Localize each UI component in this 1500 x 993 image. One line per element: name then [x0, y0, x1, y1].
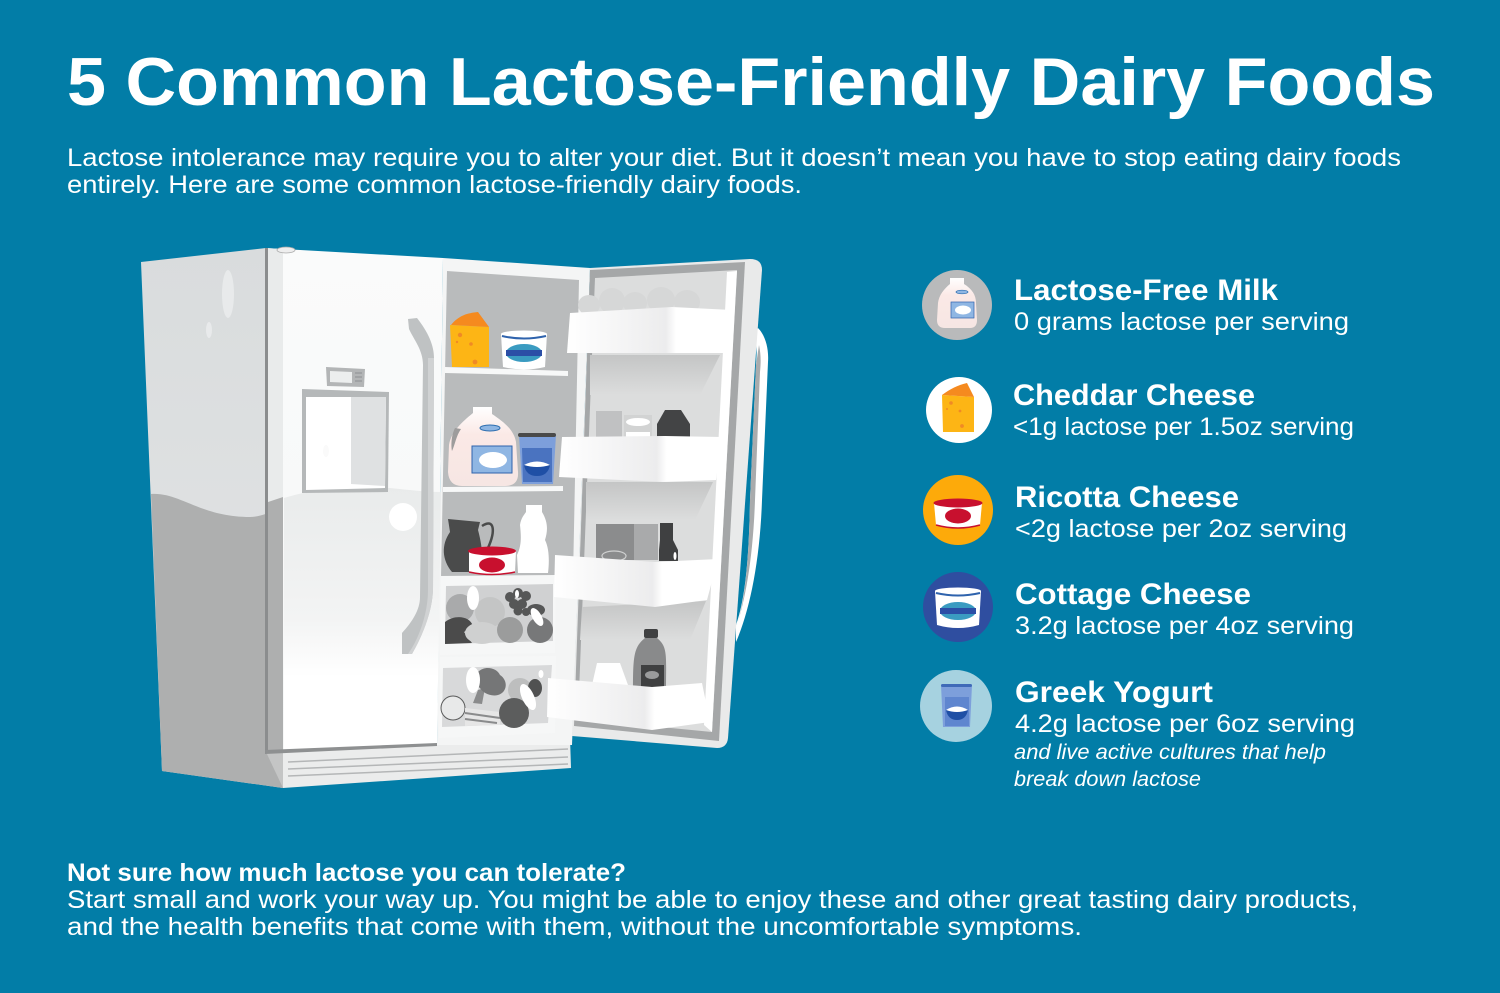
door shelf shading — [580, 355, 720, 640]
footer text: and the health benefits that come with them, without the uncomfortable symptoms. — [67, 913, 1082, 941]
note: live active cultures: break down lactose — [1014, 768, 1201, 791]
open door — [572, 259, 762, 748]
footer text: Not sure how much lactose you can tolerate? — [67, 859, 626, 887]
item: greek yogurt — [920, 670, 1355, 791]
items in second door bin — [596, 410, 690, 437]
door bin 3 — [554, 555, 718, 607]
items in fourth door bin — [592, 629, 666, 690]
icon: milk jug — [922, 270, 992, 340]
title: 5 Common Lactose-Friendly Dairy Foods — [67, 44, 1435, 120]
shelves — [443, 367, 568, 492]
door bin 2 — [559, 436, 722, 482]
intro text — [67, 144, 1401, 199]
footer text — [67, 859, 1358, 941]
open door handle — [736, 328, 768, 642]
pitcher on shelf — [444, 519, 493, 572]
name: greek yogurt: Greek Yogurt — [1015, 676, 1213, 709]
door bin 4 — [547, 678, 710, 730]
potatoes in top door bin — [578, 287, 700, 315]
fridge door front — [265, 247, 443, 754]
fridge side panel — [141, 248, 284, 788]
water dispenser — [302, 367, 389, 493]
intro text: Lactose intolerance may require you to alter your diet. But it doesn’t mean you have to stop eating dairy foods — [67, 144, 1401, 172]
name: cottage cheese: Cottage Cheese — [1015, 578, 1251, 611]
detail: ricotta cheese: <2g lactose per 2oz serving — [1015, 515, 1347, 543]
detail: greek yogurt: 4.2g lactose per 6oz serving — [1015, 710, 1355, 738]
note: live active cultures — [1014, 741, 1326, 791]
item: cottage cheese — [923, 572, 1354, 642]
cheese on shelf — [450, 312, 489, 367]
icon: ricotta tub — [923, 475, 993, 545]
fridge door handle — [402, 318, 434, 654]
footer text: Start small and work your way up. You might be able to enjoy these and other great tasting dairy products, — [67, 886, 1358, 914]
lower crisper drawer — [439, 656, 556, 738]
door bin 1 — [567, 307, 732, 353]
item: ricotta cheese — [923, 475, 1347, 545]
refrigerator illustration — [141, 247, 768, 788]
icon: cheese — [926, 377, 992, 443]
icon: yogurt cup — [920, 670, 992, 742]
cottage cheese tub on shelf — [501, 330, 547, 370]
detail: lactose-free milk: 0 grams lactose per serving — [1014, 308, 1349, 336]
name: ricotta cheese: Ricotta Cheese — [1015, 481, 1239, 514]
name: cheddar cheese: Cheddar Cheese — [1013, 379, 1255, 412]
fridge base grille — [266, 737, 571, 788]
interior frame — [437, 258, 590, 745]
name: lactose-free milk: Lactose-Free Milk — [1014, 274, 1278, 307]
items in third door bin — [596, 523, 678, 561]
detail: cottage cheese: 3.2g lactose per 4oz serving — [1015, 612, 1354, 640]
ricotta tub on shelf — [468, 546, 516, 574]
icon: cottage cheese tub — [923, 572, 993, 642]
yogurt cup on shelf — [518, 433, 556, 484]
detail: cheddar cheese: <1g lactose per 1.5oz serving — [1013, 413, 1354, 441]
interior back wall — [441, 271, 579, 578]
white milk bottle on shelf — [517, 505, 549, 573]
note: live active cultures: and live active cultures that help — [1014, 741, 1326, 764]
milk jug on shelf — [448, 407, 518, 486]
intro text: entirely. Here are some common lactose-friendly dairy foods. — [67, 171, 802, 199]
item: lactose-free milk — [922, 270, 1349, 340]
upper crisper drawer — [440, 575, 556, 655]
item: cheddar cheese — [926, 377, 1354, 443]
